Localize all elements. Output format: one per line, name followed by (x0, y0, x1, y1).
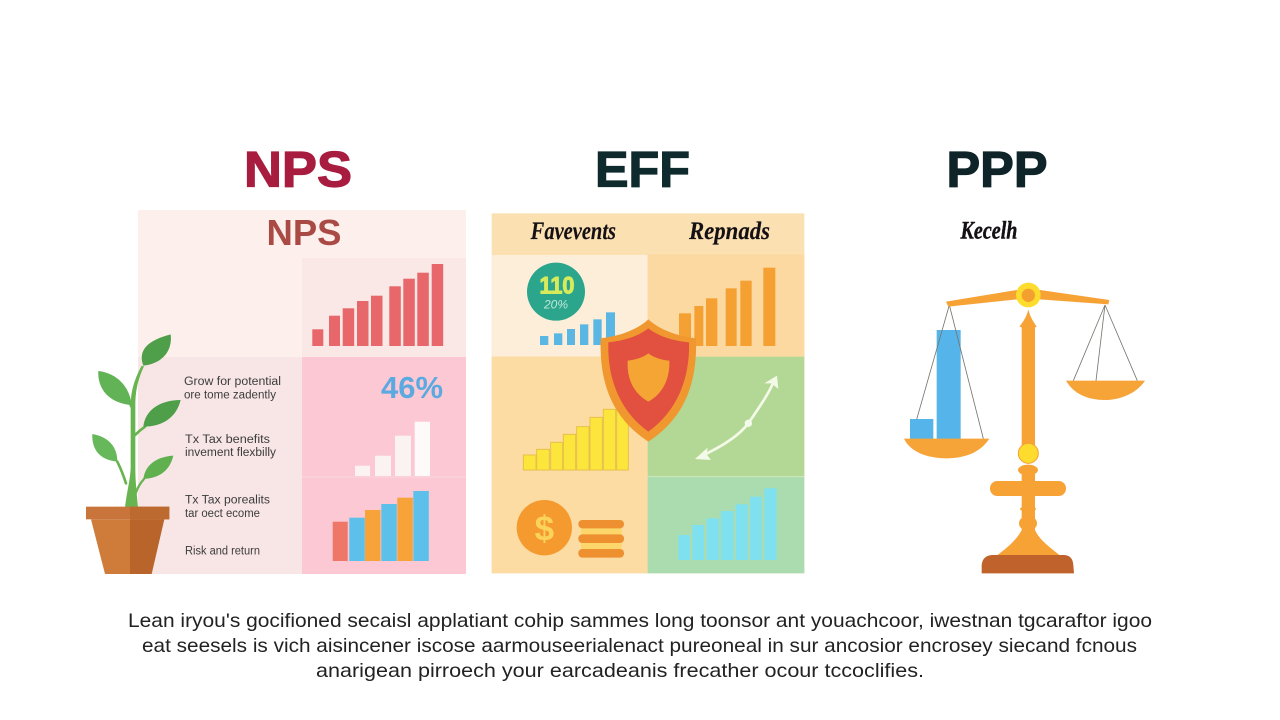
cell: top right (648, 254, 804, 357)
text: tax benefits (185, 434, 276, 459)
cell: lower right (302, 357, 466, 574)
icon: dollar coin (517, 500, 572, 555)
badge: 110 20%: 20% (543, 298, 568, 312)
scale base plinth (982, 555, 1074, 573)
bar chart: cyan (678, 488, 777, 560)
right pan (1066, 381, 1145, 400)
text: growth potential: Grow for potential (184, 376, 281, 388)
plant stem and leaves (92, 334, 181, 508)
scale beam (946, 290, 1109, 307)
plant pot (86, 507, 169, 574)
description text: anarigean pirroech your earcadeanis frecather ocour tccoclifies. (316, 660, 924, 682)
cell: teal (648, 477, 804, 573)
scale column and base (990, 309, 1066, 556)
panel background (138, 210, 466, 574)
cell: lower left (492, 357, 648, 573)
panel: EFF (492, 213, 804, 573)
bar chart: orange (679, 268, 775, 346)
title: NPS: NPS (244, 142, 352, 198)
icon: balance scale (904, 283, 1145, 573)
beam pivot (1016, 283, 1041, 307)
stat: 46%: 46% (381, 370, 443, 405)
icon: potted plant (86, 334, 181, 574)
icon: shield (601, 319, 696, 442)
icon: coin stack (578, 520, 624, 558)
text: tax benefits: Tx Tax benefits (185, 434, 270, 446)
blue bars on pan (910, 330, 961, 439)
left pan (904, 439, 989, 458)
text: risk and return: Risk and return (185, 546, 260, 558)
badge: 110 20%: 110 (539, 272, 574, 299)
text: tax benefits: invement flexbilly (185, 447, 276, 459)
bar chart: blue (540, 312, 615, 345)
text: growth potential: ore tome zadently (184, 390, 276, 402)
panel background (492, 213, 804, 573)
description text: Lean iryou's gocifioned secaisl applatiant cohip sammes long toonsor ant youachcoor, iwestnan tgcaraftor igoo (128, 610, 1152, 632)
icon: dollar coin: $ (535, 509, 554, 548)
panel heading: NPS (266, 212, 342, 253)
cell: green (648, 357, 804, 477)
panel: NPS (138, 210, 466, 574)
title: EFF: EFF (595, 142, 690, 198)
heading: Kecelh: Kecelh (960, 218, 1018, 244)
bar chart: red growth (312, 264, 443, 346)
bar chart: white (355, 422, 430, 476)
cell: upper right (302, 258, 466, 357)
text: tax porealits: Tx Tax porealits (185, 494, 270, 506)
arrow: two-way curve (695, 376, 778, 460)
title: PPP: PPP (946, 142, 1048, 198)
column knob (1018, 443, 1038, 463)
heading: Favevents: Favevents (530, 218, 616, 245)
bar chart: multicolour (333, 491, 429, 561)
pan strings (917, 305, 1137, 439)
badge: 110 20% (527, 263, 585, 321)
cell: top left (492, 255, 648, 357)
text: tax porealits (185, 494, 270, 520)
bar chart: yellow (523, 409, 628, 470)
text: growth potential (184, 376, 281, 402)
description text (128, 610, 1152, 682)
heading: Repnads: Repnads (688, 218, 770, 245)
cell: lower left (138, 357, 302, 574)
text: tax porealits: tar oect ecome (185, 508, 260, 520)
description text: eat seesels is vich aisincener iscose aarmouseerialenact pureoneal in sur ancosior encrosey siecand fcnous (142, 635, 1137, 657)
